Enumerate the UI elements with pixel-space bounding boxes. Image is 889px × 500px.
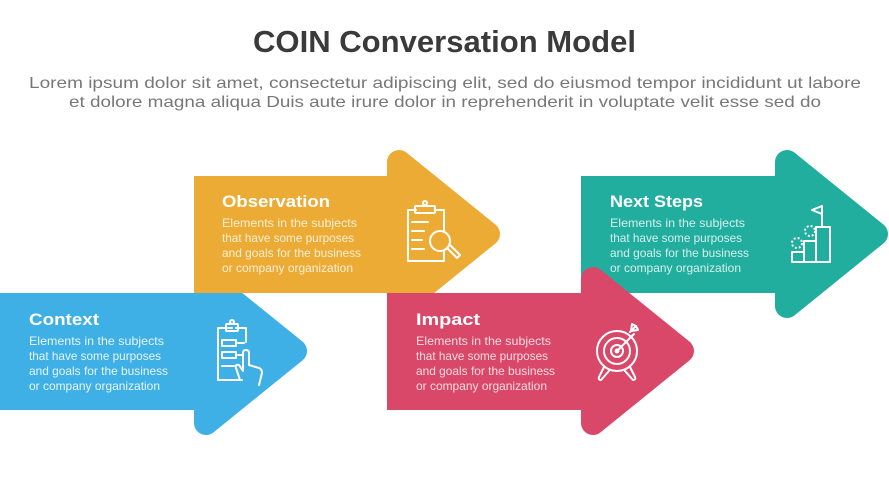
icon: clipboard hand (218, 320, 262, 385)
text: observation: Elements in the subjects (222, 216, 357, 230)
text: observation: or company organization (222, 261, 353, 275)
text: context: and goals for the business (29, 364, 168, 378)
heading: context: Context (29, 310, 99, 329)
title: COIN Conversation Model (253, 24, 636, 59)
text: impact: Elements in the subjects (416, 334, 551, 348)
panel: context (0, 279, 295, 424)
panel: impact (387, 279, 682, 424)
text: impact: or company organization (416, 379, 547, 393)
icon: clipboard magnifier (408, 201, 460, 261)
subtitle (29, 75, 861, 111)
heading: next steps: Next Steps (610, 192, 703, 211)
icon: steps flag (792, 206, 830, 262)
heading: impact: Impact (416, 310, 480, 329)
subtitle: et dolore magna aliqua Duis aute irure dolor in reprehenderit in voluptate velit esse sed do (69, 94, 821, 111)
subtitle: Lorem ipsum dolor sit amet, consectetur adipiscing elit, sed do eiusmod tempor incididunt ut labore (29, 75, 861, 92)
text: next steps: and goals for the business (610, 246, 749, 260)
text: context: Elements in the subjects (29, 334, 164, 348)
text: observation: that have some purposes (222, 231, 354, 245)
text: next steps: that have some purposes (610, 231, 742, 245)
text: observation (222, 216, 361, 275)
text: impact: and goals for the business (416, 364, 555, 378)
text: context (29, 334, 168, 393)
text: observation: and goals for the business (222, 246, 361, 260)
heading: observation: Observation (222, 192, 330, 211)
text: next steps (610, 216, 749, 275)
icon: target (597, 324, 638, 380)
panel: observation (194, 162, 488, 307)
text: next steps: or company organization (610, 261, 741, 275)
panel: next steps (581, 162, 876, 307)
text: context: or company organization (29, 379, 160, 393)
text: next steps: Elements in the subjects (610, 216, 745, 230)
text: context: that have some purposes (29, 349, 161, 363)
text: impact (416, 334, 555, 393)
text: impact: that have some purposes (416, 349, 548, 363)
